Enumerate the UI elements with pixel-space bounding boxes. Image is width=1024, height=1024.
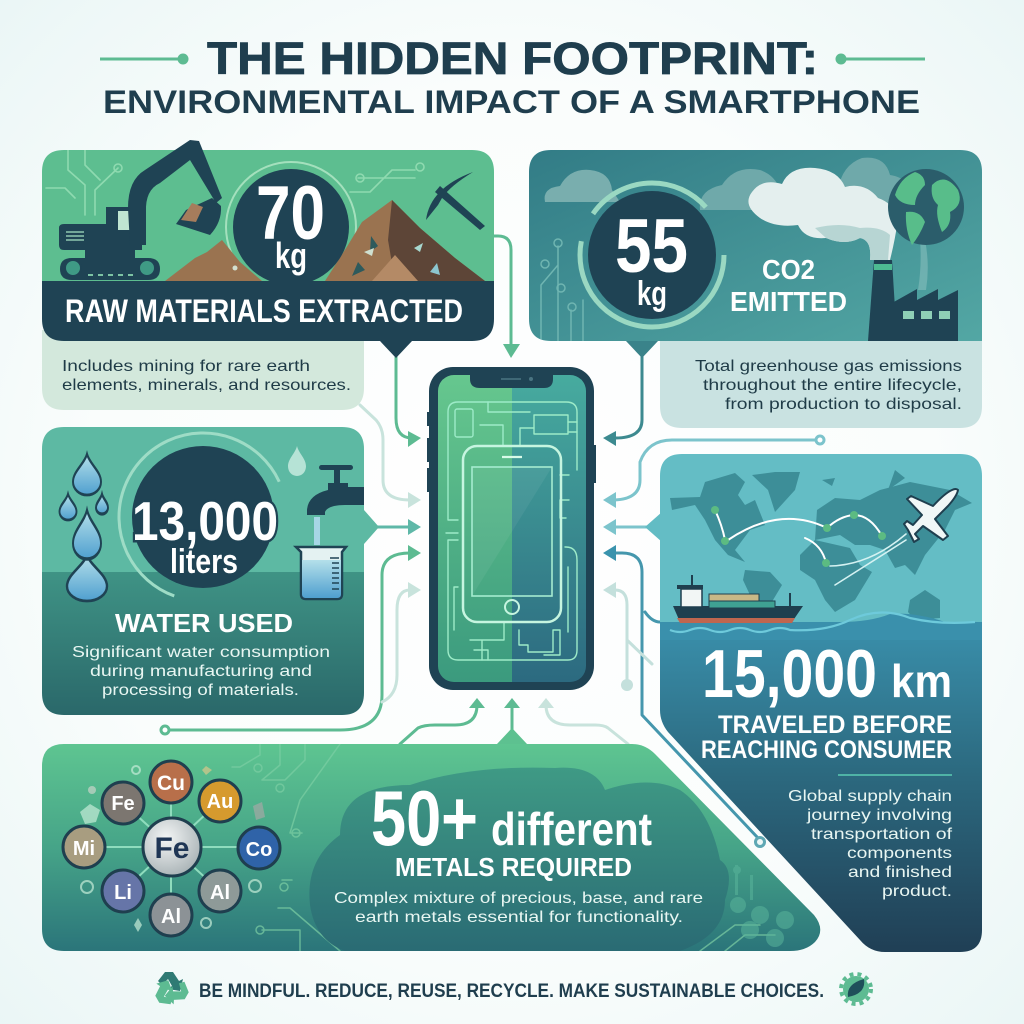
description box: Total greenhouse gas emissions: [695, 358, 962, 375]
element: Al: [199, 870, 241, 912]
description: processing of materials.: [102, 682, 299, 699]
route lines: [715, 510, 906, 585]
heading band: [42, 281, 494, 358]
icon: element cluster: [63, 761, 280, 936]
heading: traveled: TRAVELED BEFORE: [718, 711, 952, 739]
element: central Fe: Fe: [154, 832, 190, 865]
water section: [848, 614, 943, 622]
element: Mi: [63, 826, 105, 868]
description: [788, 788, 953, 900]
icon: gear leaf: [841, 974, 871, 1004]
description: transportation of: [811, 826, 953, 843]
heading: traveled: [701, 711, 952, 764]
icon: recycle: [150, 972, 192, 1009]
heading: water used: WATER USED: [115, 608, 293, 638]
description: during manufacturing and: [90, 663, 312, 680]
connector arrows: [161, 236, 824, 846]
panel: water used: [42, 409, 379, 715]
stat: 70 kg: kg: [275, 235, 307, 276]
heading: CO2 emitted: EMITTED: [730, 286, 847, 317]
stat: 13,000 liters: [95, 409, 311, 625]
icon: excavator: [59, 140, 222, 280]
stat: 13,000 liters: 13,000: [132, 490, 278, 552]
element: Al: [150, 894, 192, 936]
description: [334, 890, 703, 926]
element: Au: [199, 780, 241, 822]
element: Fe: Fe: [111, 793, 135, 815]
element: Co: [238, 827, 280, 869]
stat: 50+ different: different: [491, 803, 652, 855]
element: Mi: Mi: [73, 838, 95, 860]
heading: CO2 emitted: CO2: [762, 254, 815, 285]
element: Fe: [102, 782, 144, 824]
icon: world map: [670, 470, 972, 622]
inner phone outline: [463, 446, 561, 622]
stat: 70 kg: 70: [256, 171, 325, 256]
icon: ore mounds: [165, 200, 485, 281]
title: ENVIRONMENTAL IMPACT OF A SMARTPHONE: [103, 84, 920, 120]
icon: cargo ship: [673, 575, 803, 623]
description: Global supply chain: [788, 788, 952, 805]
description: journey involving: [806, 807, 952, 824]
stat: 15,000 km: km: [891, 655, 952, 707]
element: Cu: [150, 761, 192, 803]
dark blob behind text: [309, 768, 729, 951]
element: Al: Al: [210, 882, 230, 904]
icon: pickaxe: [426, 172, 485, 230]
description box: throughout the entire lifecycle,: [703, 377, 962, 394]
icon: airplane: [904, 489, 958, 542]
panel: transport: [645, 454, 982, 952]
description box: Includes mining for rare earth: [62, 358, 310, 375]
stat: 55 kg: [580, 183, 724, 327]
icon: globe: [888, 169, 964, 245]
panel: raw materials: [42, 140, 494, 410]
description: product.: [882, 883, 952, 900]
stat: 55 kg: 55: [615, 204, 688, 289]
title: [100, 33, 925, 120]
icon: small pale drop: [288, 446, 306, 476]
icon: water drops: [60, 454, 108, 601]
heading: metals required: METALS REQUIRED: [395, 852, 632, 882]
stat: 15,000 km: 15,000: [702, 636, 877, 712]
icon: background clouds: [545, 158, 918, 210]
stat: 55 kg: kg: [637, 275, 667, 313]
element: Co: Co: [246, 839, 272, 861]
icon: factory: [868, 260, 958, 341]
element: Li: Li: [114, 882, 132, 904]
element: Au: Au: [207, 791, 233, 813]
description: [72, 644, 330, 699]
icon: smoke cloud: [748, 168, 928, 290]
element: central Fe: [143, 818, 201, 876]
element: Li: [102, 870, 144, 912]
element: Cu: Cu: [157, 772, 185, 795]
heading: traveled: REACHING CONSUMER: [701, 736, 952, 764]
central smartphone: [427, 367, 596, 690]
stat: 70 kg: [233, 169, 349, 285]
icon: faucet: [307, 465, 364, 545]
description: Significant water consumption: [72, 644, 330, 661]
description: and finished: [848, 864, 952, 881]
element: Al: Al: [161, 906, 181, 928]
description: earth metals essential for functionality.: [355, 909, 683, 926]
circuit traces: [446, 402, 577, 660]
description box: [42, 330, 364, 410]
description box: from production to disposal.: [725, 396, 962, 413]
stat: 50+ different: [371, 774, 652, 862]
panel: CO2 emitted: [529, 150, 982, 428]
heading: CO2 emitted: [730, 254, 847, 317]
heading band: RAW MATERIALS EXTRACTED: [65, 293, 463, 329]
icon: beaker: [296, 547, 346, 599]
stat: 13,000 liters: liters: [170, 543, 238, 581]
footer: [150, 972, 871, 1009]
description box: [660, 335, 982, 428]
stat: 50+ different: 50+: [371, 774, 478, 862]
footer message: BE MINDFUL. REDUCE, REUSE, RECYCLE. MAKE SUSTAINABLE CHOICES.: [199, 981, 824, 1002]
description: Complex mixture of precious, base, and rare: [334, 890, 703, 907]
description box: elements, minerals, and resources.: [62, 377, 351, 394]
title: THE HIDDEN FOOTPRINT:: [207, 33, 818, 84]
panel: metals: [42, 728, 842, 951]
description: components: [847, 845, 952, 862]
